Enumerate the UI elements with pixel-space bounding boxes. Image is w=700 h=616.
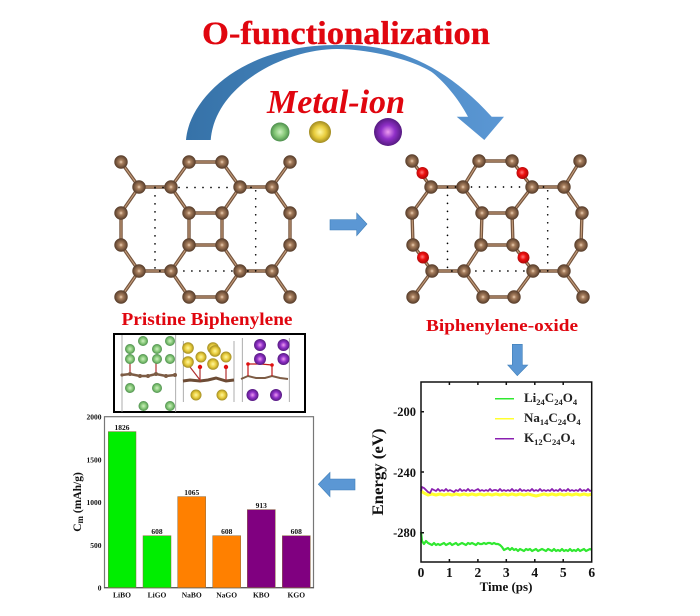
arrow: pristine to oxide	[330, 213, 367, 236]
legend: C	[543, 430, 552, 445]
metal-ion label: Metal-ion	[266, 84, 405, 121]
plot frame and ticks	[421, 382, 592, 562]
x ticks: 2	[475, 565, 482, 580]
x labels: KBO	[253, 590, 270, 600]
x labels	[113, 590, 305, 600]
energy traces	[421, 487, 592, 551]
legend: K	[524, 430, 534, 445]
arrow: down to energy plot	[508, 344, 528, 376]
y ticks	[86, 412, 102, 592]
x labels: LiGO	[148, 590, 167, 600]
y ticks: 1000	[86, 498, 102, 507]
legend: O	[561, 430, 571, 445]
legend: 24	[552, 437, 561, 447]
x ticks: 6	[588, 565, 595, 580]
x axis title: Time (ps)	[480, 579, 532, 594]
legend: 14	[540, 417, 549, 427]
y ticks: -200	[393, 405, 416, 419]
legend: C	[548, 410, 558, 425]
legend	[495, 390, 581, 447]
y ticks: 0	[98, 584, 102, 592]
bar values: 608	[291, 527, 302, 536]
legend: C	[545, 390, 554, 405]
y axis title: (mAh/g)	[72, 472, 84, 516]
yellow Na structure	[182, 342, 234, 400]
biphenylene-oxide lattice	[405, 154, 590, 304]
x labels: LiBO	[113, 590, 131, 600]
bar values: 1065	[184, 488, 199, 497]
title: O-functionalization	[202, 16, 490, 52]
bar values: 913	[256, 501, 267, 510]
bars	[108, 432, 310, 588]
legend: 24	[536, 397, 546, 407]
y ticks: 2000	[86, 412, 102, 422]
y ticks: 1500	[86, 456, 102, 464]
big curved arrow	[186, 45, 504, 140]
legend: Na	[524, 410, 540, 425]
panel: adsorption structures	[114, 334, 305, 412]
legend: 12	[534, 437, 543, 447]
x labels: KGO	[288, 590, 305, 600]
y axis title: Energy (eV)	[370, 428, 387, 516]
x ticks: 1	[446, 565, 453, 580]
energy line chart	[370, 382, 595, 594]
legend: 4	[573, 397, 578, 407]
y ticks	[393, 405, 416, 540]
x ticks: 0	[418, 565, 425, 580]
metal ion spheres	[270, 118, 402, 146]
x labels: NaGO	[216, 590, 237, 600]
purple K structure	[241, 339, 290, 401]
legend: 24	[558, 417, 567, 427]
bar values: 608	[151, 527, 163, 536]
x ticks	[418, 565, 595, 580]
arrow: energy plot to bar chart	[318, 472, 355, 497]
legend: O	[563, 390, 573, 405]
green Li structure	[120, 336, 177, 411]
y axis title: C	[72, 523, 84, 532]
legend: 24	[554, 397, 563, 407]
y ticks: -280	[393, 526, 416, 540]
bar values	[114, 423, 302, 536]
capacity bar chart	[72, 412, 314, 600]
pristine biphenylene lattice	[114, 155, 297, 304]
x ticks: 4	[531, 565, 538, 580]
label: biphenylene-oxide: Biphenylene-oxide	[426, 316, 579, 335]
legend: 4	[571, 437, 576, 447]
label: pristine biphenylene: Pristine Biphenylene	[122, 309, 293, 329]
y ticks: 500	[90, 541, 102, 550]
legend: Li	[524, 390, 536, 405]
x ticks: 5	[560, 565, 567, 580]
bar values: 608	[221, 527, 233, 536]
x ticks: 3	[503, 565, 510, 580]
y ticks: -240	[393, 466, 416, 480]
y axis title: m	[75, 515, 85, 523]
legend: 4	[576, 417, 581, 427]
bar values: 1826	[114, 423, 130, 432]
x labels: NaBO	[182, 590, 202, 600]
legend: O	[566, 410, 576, 425]
